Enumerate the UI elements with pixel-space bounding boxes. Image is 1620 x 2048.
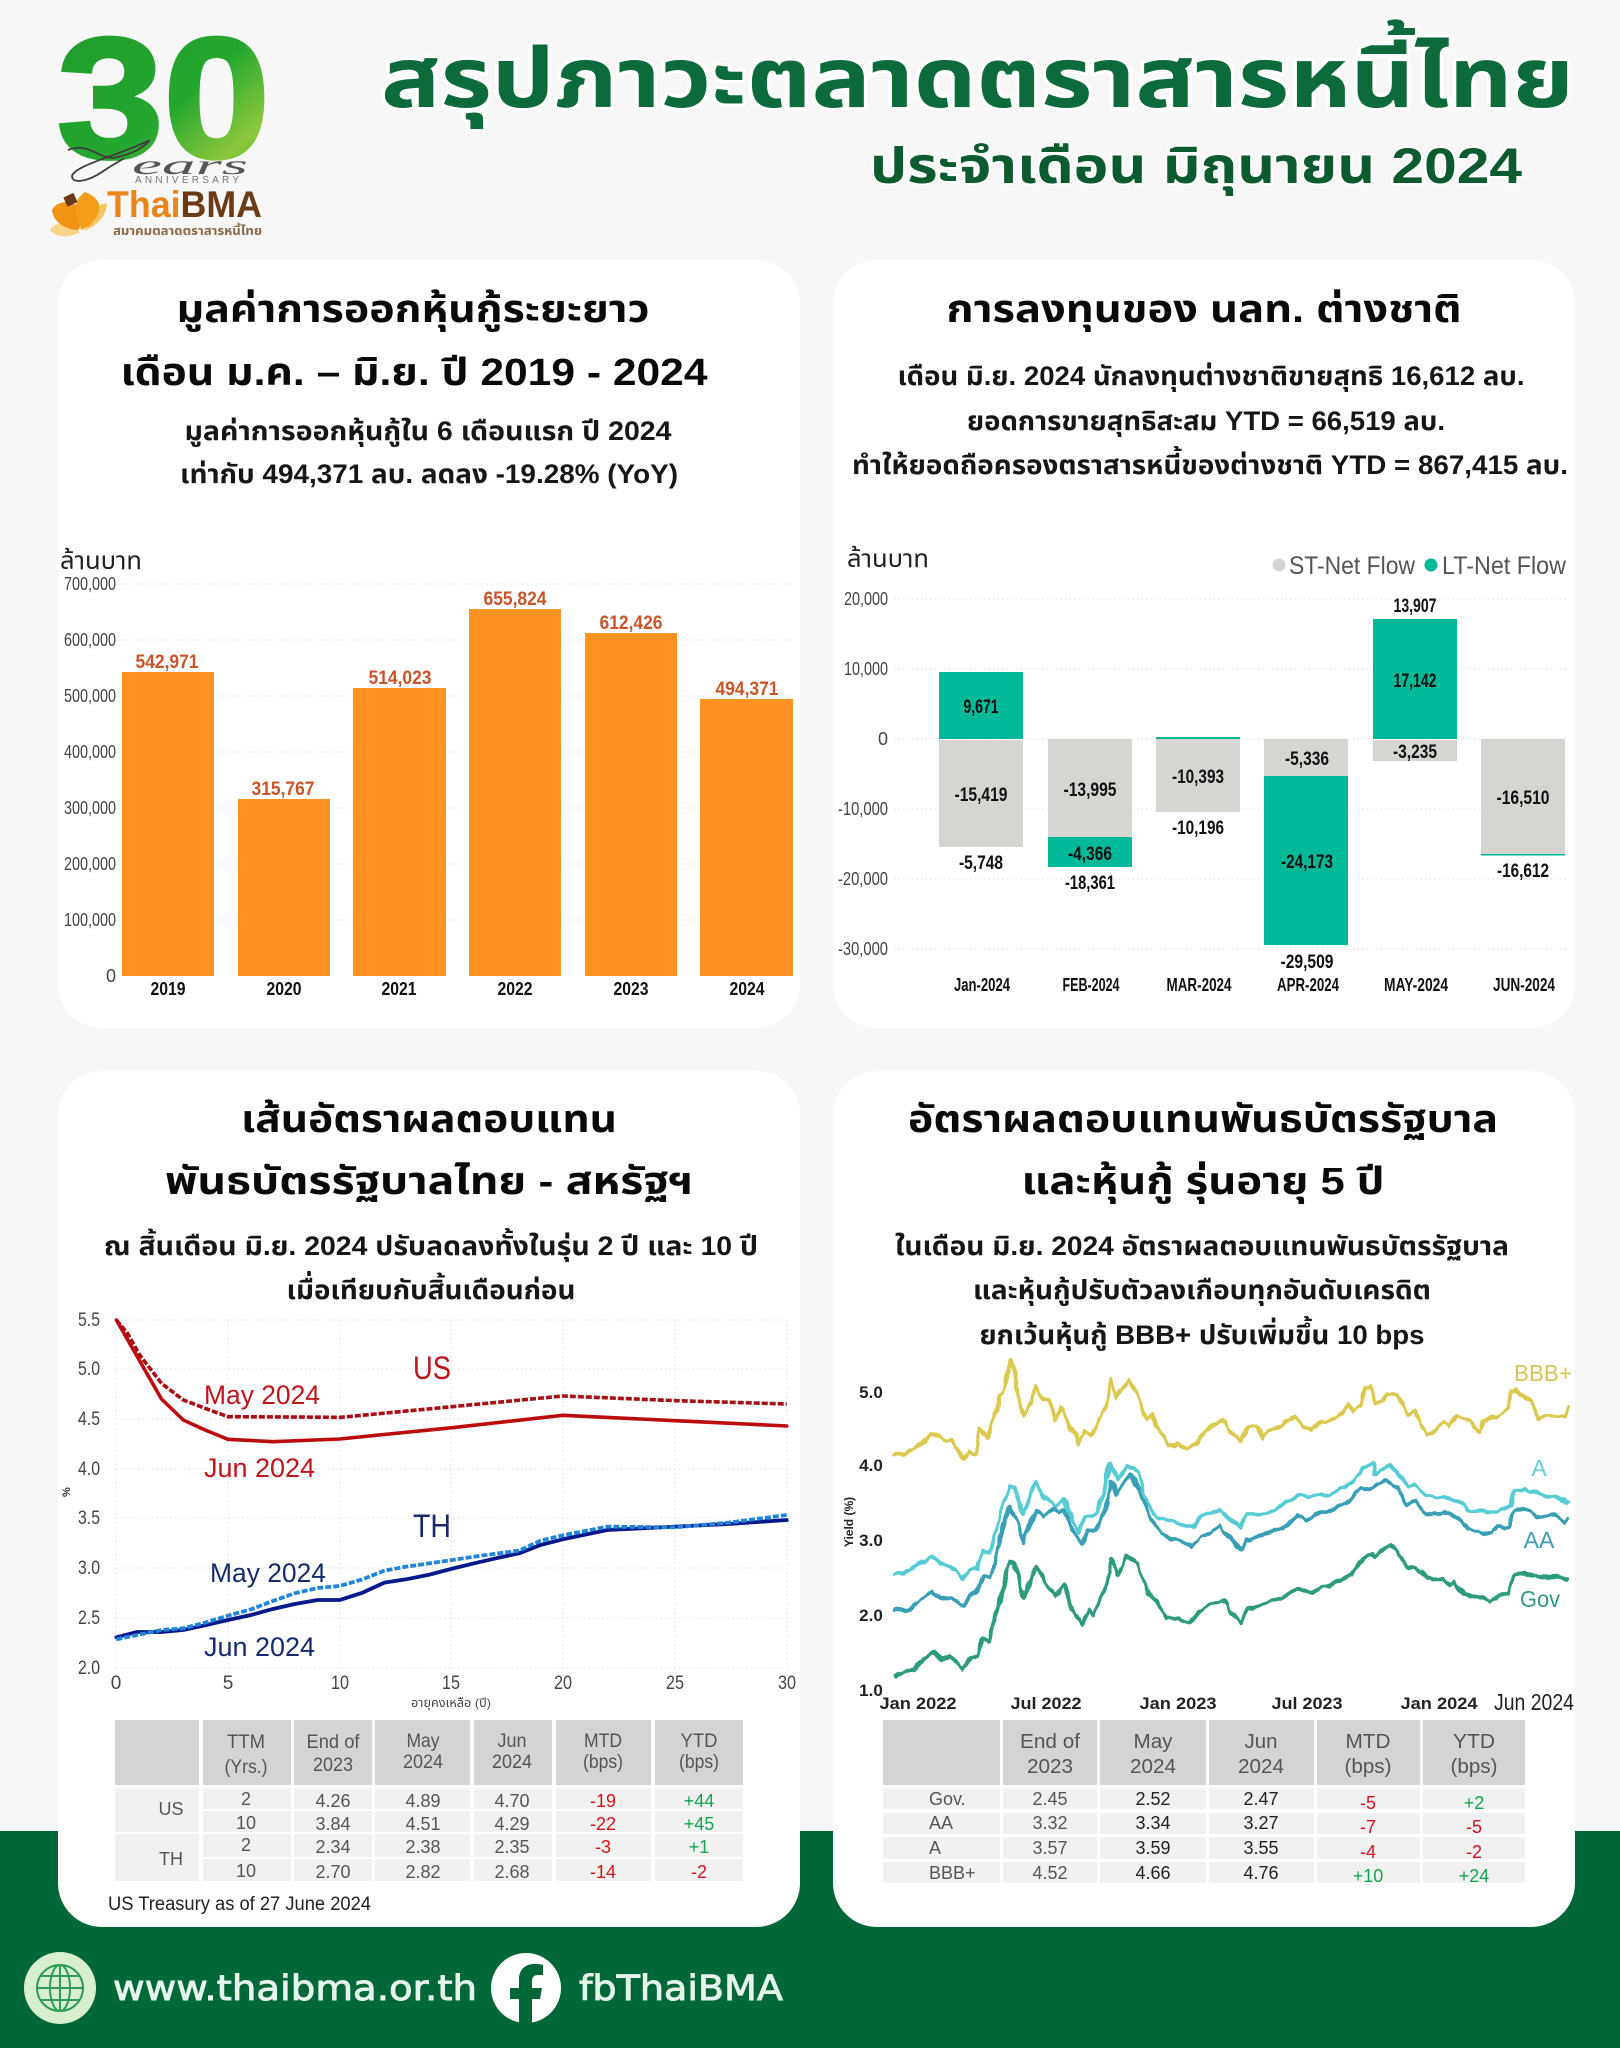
table: US and TH yields: 2.35 [494, 1837, 530, 1857]
table: yields by credit rating: May [1134, 1731, 1172, 1753]
stacked bar chart: net flows: -15,419 [954, 785, 1008, 806]
line: A [895, 1463, 1568, 1578]
stacked bar chart: net flows: -10,000 [838, 799, 888, 819]
table: US and TH yields: -22 [590, 1814, 616, 1834]
line chart: 5-year yields: 5.0 [859, 1383, 883, 1402]
line chart: 5-year yields: 3.0 [859, 1531, 883, 1550]
heading: การลงทุนของ นลท. ต่างชาติ [946, 289, 1462, 332]
legend: ST-Net Flow [1289, 552, 1416, 580]
table: US and TH yields: +44 [684, 1791, 714, 1811]
logo: ThaiBMA 30 years: ears [132, 150, 248, 180]
table: US and TH yields: TTM [227, 1732, 265, 1753]
summary text: ทำให้ยอดถือครองตราสารหนี้ของต่างชาติ YTD = 867,415 ลบ. [852, 446, 1568, 480]
summary text: เมื่อเทียบกับสิ้นเดือนก่อน [286, 1271, 576, 1305]
stacked bar chart: net flows: 20,000 [844, 589, 888, 609]
table: yields by credit rating: 3.59 [1135, 1838, 1171, 1858]
bar chart: issuance 2019-2024: 400,000 [64, 742, 116, 762]
stacked bar chart: net flows: -5,336 [1285, 749, 1329, 770]
line chart: 5-year yields: Jan 2024 [1400, 1694, 1478, 1713]
table: US and TH yields: YTD [680, 1731, 718, 1752]
table: yields by credit rating: (bps) [1344, 1756, 1392, 1778]
stacked bar chart: net flows: -20,000 [838, 869, 888, 889]
table: yields by credit rating: Jun [1244, 1731, 1278, 1753]
bar chart: issuance 2019-2024: 600,000 [64, 630, 116, 650]
line chart: yield curves: อายุคงเหลือ (ปี) [411, 1696, 491, 1710]
logo: ThaiBMA 30 years: สมาคมตลาดตราสารหนี้ไทย [113, 222, 262, 238]
line chart: yield curves: 30 [778, 1673, 796, 1694]
table: US and TH yields: 10 [236, 1813, 256, 1833]
subtitle: ประจำเดือน มิถุนายน 2024 [870, 138, 1522, 196]
line chart: yield curves: 4.0 [78, 1459, 100, 1480]
logo: ThaiBMA 30 years: ThaiBMA [107, 184, 262, 225]
table: yields by credit rating: 4.76 [1243, 1863, 1279, 1883]
line chart: yield curves: 2.0 [78, 1658, 100, 1679]
line chart: 5-year yields: Jun 2024 [1494, 1689, 1574, 1715]
table: yields by credit rating: 4.66 [1135, 1863, 1171, 1883]
stacked bar chart: net flows: -30,000 [838, 939, 888, 959]
table: US and TH yields: 2.70 [315, 1862, 351, 1882]
panel: Thai and US government yield curves [58, 1071, 800, 1927]
line chart: yield curves: 25 [666, 1673, 684, 1694]
table: yields by credit rating: 2024 [1130, 1756, 1176, 1778]
line chart: yield curves: 3.5 [78, 1508, 100, 1529]
line chart: yield curves: May 2024 [210, 1558, 326, 1588]
summary text: ยอดการขายสุทธิสะสม YTD = 66,519 ลบ. [967, 406, 1445, 437]
line chart: yield curves: 15 [442, 1673, 460, 1694]
table: US and TH yields: (bps) [583, 1752, 623, 1773]
table: yields by credit rating: 3.57 [1032, 1838, 1068, 1858]
stacked bar chart: net flows: -24,173 [1281, 852, 1333, 873]
table: yields by credit rating: 2023 [1027, 1756, 1073, 1778]
stacked bar chart: net flows: MAR-2024 [1166, 975, 1232, 995]
line chart: yield curves: % [61, 1487, 73, 1497]
table: US and TH yields: 2.38 [405, 1837, 441, 1857]
legend [1272, 552, 1567, 580]
line: BBB+ [895, 1360, 1568, 1461]
table: US and TH yields: 4.29 [494, 1814, 530, 1834]
stacked bar chart: net flows: APR-2024 [1277, 975, 1339, 995]
line chart: 5-year yields: BBB+ [1514, 1360, 1572, 1386]
logo: ThaiBMA 30 years: ANNIVERSARY [135, 175, 239, 186]
summary text: เท่ากับ 494,371 ลบ. ลดลง -19.28% (YoY) [180, 459, 678, 489]
line chart: yield curves: TH [413, 1508, 451, 1544]
table: yields by credit rating: -7 [1360, 1817, 1376, 1837]
bar chart: issuance 2019-2024: ล้านบาท [60, 547, 142, 575]
stacked bar chart: net flows: 9,671 [964, 697, 999, 718]
line chart: yield curves: 20 [554, 1673, 572, 1694]
panel: long-term corporate bond issuance [58, 260, 800, 1028]
stacked bar chart: net flows: -5,748 [959, 853, 1003, 874]
table: US and TH yields [115, 1720, 743, 1882]
stacked bar chart: net flows: 13,907 [1394, 596, 1436, 617]
table: US and TH yields: -14 [590, 1862, 616, 1882]
table: US and TH yields: -3 [595, 1837, 611, 1857]
stacked bar chart: net flows: ล้านบาท [847, 545, 929, 573]
line chart: yield curves: 4.5 [78, 1409, 100, 1430]
summary text: และหุ้นกู้ปรับตัวลงเกือบทุกอันดับเครดิต [973, 1275, 1431, 1306]
table: US and TH yields: US [158, 1799, 184, 1819]
source note: US Treasury as of 27 June 2024 [108, 1894, 371, 1915]
heading [908, 1099, 1498, 1204]
footer: website: www.thaibma.or.th [113, 1969, 477, 2009]
bar chart: issuance 2019-2024: 2023 [614, 979, 648, 999]
table: yields by credit rating: 4.52 [1032, 1863, 1068, 1883]
line chart: yield curves: 5 [223, 1673, 233, 1694]
line chart: yield curves [61, 1310, 796, 1710]
table: yields by credit rating: +2 [1464, 1793, 1484, 1813]
stacked bar chart: net flows: -4,366 [1068, 844, 1112, 865]
line chart: yield curves: Jun 2024 [204, 1632, 315, 1662]
table: US and TH yields: 4.51 [405, 1814, 441, 1834]
bar chart: issuance 2019-2024: 2024 [730, 979, 764, 999]
table: yields by credit rating: Gov. [929, 1789, 966, 1809]
table: US and TH yields: -2 [691, 1862, 707, 1882]
table: yields by credit rating: 2024 [1238, 1756, 1284, 1778]
heading [120, 289, 708, 394]
line: AA [895, 1475, 1568, 1610]
line: US May 2024 [116, 1320, 787, 1417]
table: yields by credit rating: -4 [1360, 1842, 1376, 1862]
stacked bar chart: net flows: -29,509 [1280, 952, 1334, 973]
table: yields by credit rating [883, 1720, 1525, 1886]
table: US and TH yields: +45 [684, 1814, 714, 1834]
stacked bar chart: net flows: MAY-2024 [1384, 975, 1448, 995]
line chart: yield curves: 10 [331, 1673, 349, 1694]
table: yields by credit rating: -2 [1466, 1842, 1482, 1862]
line: TH Jun 2024 [116, 1520, 787, 1637]
icon: lotus [50, 192, 107, 236]
summary text [180, 416, 678, 489]
table: US and TH yields: 2024 [492, 1752, 532, 1773]
bar chart: issuance 2019-2024: 0 [106, 966, 116, 986]
table: yields by credit rating: 3.27 [1243, 1813, 1279, 1833]
table: yields by credit rating: MTD [1346, 1731, 1390, 1753]
line chart: yield curves: May 2024 [204, 1380, 320, 1410]
footer: facebook: fbThaiBMA [579, 1969, 783, 2009]
line chart: 5-year yields: Jul 2023 [1272, 1694, 1342, 1713]
stacked bar chart: net flows: 17,142 [1394, 671, 1436, 692]
table: yields by credit rating: YTD [1453, 1731, 1495, 1753]
summary text: ณ สิ้นเดือน มิ.ย. 2024 ปรับลดลงทั้งในรุ่น 2 ปี และ 10 ปี [104, 1228, 758, 1262]
table: US and TH yields: 2.34 [315, 1837, 351, 1857]
bar chart: issuance 2019-2024: 655,824 [484, 589, 547, 610]
table: yields by credit rating: End of [1020, 1731, 1080, 1753]
table: US and TH yields: 2 [241, 1789, 251, 1809]
table: yields by credit rating: -5 [1360, 1793, 1376, 1813]
bar chart: issuance 2019-2024: 100,000 [64, 910, 116, 930]
bar chart: issuance 2019-2024: 494,371 [716, 679, 779, 700]
table: yields by credit rating: AA [929, 1813, 953, 1833]
line chart: yield curves: 0 [111, 1673, 121, 1694]
table: yields by credit rating: 3.34 [1135, 1813, 1171, 1833]
stacked bar chart: net flows: -3,235 [1393, 742, 1437, 763]
table: US and TH yields: +1 [689, 1837, 709, 1857]
table: yields by credit rating: 2.52 [1135, 1789, 1171, 1809]
stacked bar chart: net flows: 0 [878, 729, 888, 749]
table: US and TH yields: (bps) [679, 1752, 719, 1773]
bar chart: issuance 2019-2024: 700,000 [64, 574, 116, 594]
bar chart: issuance 2019-2024: 2020 [266, 979, 302, 999]
table: US and TH yields: 2024 [403, 1752, 443, 1773]
table: US and TH yields: Jun [498, 1731, 526, 1752]
table: US and TH yields: 2 [241, 1835, 251, 1855]
table: US and TH yields: 2.82 [405, 1862, 441, 1882]
stacked bar chart: net flows: 10,000 [844, 659, 888, 679]
summary text: ในเดือน มิ.ย. 2024 อัตราผลตอบแทนพันธบัตรรัฐบาล [895, 1231, 1509, 1261]
icon: facebook [491, 1953, 561, 2023]
heading: พันธบัตรรัฐบาลไทย - สหรัฐฯ [165, 1161, 693, 1203]
footer: facebook [491, 1953, 783, 2023]
table: yields by credit rating: (bps) [1450, 1756, 1498, 1778]
table: yields by credit rating: BBB+ [929, 1863, 976, 1883]
footer: website [24, 1952, 477, 2024]
summary text [104, 1228, 758, 1305]
line chart: 5-year yields: A [1531, 1455, 1547, 1481]
table: US and TH yields: 4.89 [405, 1791, 441, 1811]
line chart: yield curves: 3.0 [78, 1558, 100, 1579]
panel: foreign investors [833, 260, 1575, 1028]
legend: LT-Net Flow [1442, 552, 1567, 580]
title: สรุปภาวะตลาดตราสารหนี้ไทย [381, 19, 1574, 129]
stacked bar chart: net flows: -10,393 [1172, 767, 1224, 788]
heading: มูลค่าการออกหุ้นกู้ระยะยาว [176, 289, 650, 332]
line chart: yield curves: 2.5 [78, 1608, 100, 1629]
stacked bar chart: net flows: FEB-2024 [1062, 975, 1120, 995]
summary text: มูลค่าการออกหุ้นกู้ใน 6 เดือนแรก ปี 2024 [184, 416, 672, 447]
bar chart: issuance 2019-2024: 2022 [498, 979, 532, 999]
line chart: 5-year yields: 4.0 [859, 1456, 883, 1475]
icon: globe [24, 1952, 96, 2024]
footer band [0, 1831, 1620, 2048]
line chart: yield curves: 5.5 [78, 1310, 100, 1331]
line chart: 5-year yields: 2.0 [859, 1606, 883, 1625]
stacked bar chart: net flows: JUN-2024 [1493, 975, 1555, 995]
line chart: yield curves: 5.0 [78, 1359, 100, 1380]
table: US and TH yields: (Yrs.) [224, 1757, 268, 1778]
table: US and TH yields: 10 [236, 1861, 256, 1881]
stacked bar chart: net flows: -13,995 [1064, 780, 1117, 801]
bar chart: issuance 2019-2024: 612,426 [600, 613, 662, 634]
bar chart: issuance 2019-2024: 542,971 [136, 652, 199, 673]
table: yields by credit rating: +24 [1459, 1866, 1489, 1886]
line chart: 5-year yields: Yield (%) [842, 1497, 856, 1547]
bar chart: issuance 2019-2024: 315,767 [252, 779, 314, 800]
bar chart: issuance 2019-2024: 2021 [382, 979, 416, 999]
table: yields by credit rating: 3.32 [1032, 1813, 1068, 1833]
logo: ThaiBMA 30 years: 30 [57, 3, 270, 194]
stacked bar chart: net flows: -10,196 [1172, 818, 1224, 839]
bar chart: issuance 2019-2024: 200,000 [64, 854, 116, 874]
table: US and TH yields: 2.68 [494, 1862, 530, 1882]
heading: และหุ้นกู้ รุ่นอายุ 5 ปี [1022, 1161, 1384, 1204]
line: US Jun 2024 [116, 1320, 787, 1442]
table: US and TH yields: 2023 [313, 1755, 353, 1776]
stacked bar chart: net flows: -16,612 [1497, 861, 1549, 882]
line chart: 5-year yields: Gov [1520, 1586, 1560, 1612]
line chart: yield curves: Jun 2024 [204, 1453, 315, 1483]
line chart: 5-year yields [842, 1360, 1574, 1715]
table: US and TH yields: May [406, 1731, 440, 1752]
table: US and TH yields: 3.84 [315, 1814, 351, 1834]
table: yields by credit rating: +10 [1353, 1866, 1383, 1886]
table: US and TH yields: TH [159, 1849, 183, 1869]
table: US and TH yields: 4.70 [494, 1791, 530, 1811]
heading [165, 1099, 693, 1203]
summary text: เดือน มิ.ย. 2024 นักลงทุนต่างชาติขายสุทธิ 16,612 ลบ. [898, 361, 1524, 392]
line chart: yield curves: US [413, 1350, 451, 1386]
stacked bar chart: net flows: -16,510 [1496, 788, 1550, 809]
line: TH May 2024 [116, 1515, 787, 1639]
bar chart: issuance 2019-2024: 2019 [150, 979, 186, 999]
line chart: 5-year yields: Jan 2022 [880, 1694, 956, 1713]
table: US and TH yields: -19 [590, 1791, 616, 1811]
table: yields by credit rating: -5 [1466, 1817, 1482, 1837]
bar chart: issuance 2019-2024: 300,000 [64, 798, 116, 818]
table: US and TH yields: 4.26 [315, 1791, 351, 1811]
heading: เส้นอัตราผลตอบแทน [241, 1099, 617, 1141]
bar chart: issuance 2019-2024: 500,000 [64, 686, 116, 706]
table: yields by credit rating: 2.47 [1243, 1789, 1279, 1809]
summary text [895, 1231, 1509, 1351]
line chart: 5-year yields: 1.0 [859, 1681, 883, 1700]
stacked bar chart: net flows: -18,361 [1065, 873, 1115, 894]
table: yields by credit rating: 3.55 [1243, 1838, 1279, 1858]
table: US and TH yields: End of [306, 1732, 360, 1753]
line chart: 5-year yields: Jul 2022 [1010, 1694, 1082, 1713]
table: US and TH yields: MTD [584, 1731, 622, 1752]
heading: อัตราผลตอบแทนพันธบัตรรัฐบาล [908, 1099, 1498, 1141]
heading: เดือน ม.ค. – มิ.ย. ปี 2019 - 2024 [120, 352, 708, 394]
summary text [852, 361, 1568, 480]
stacked bar chart: net flows: Jan-2024 [954, 975, 1010, 995]
line chart: 5-year yields: Jan 2023 [1140, 1694, 1216, 1713]
line chart: 5-year yields: AA [1524, 1527, 1555, 1553]
line: Gov [895, 1546, 1568, 1677]
bar chart: issuance 2019-2024: 514,023 [368, 668, 432, 689]
table: yields by credit rating: 2.45 [1032, 1789, 1068, 1809]
stacked bar chart: net flows [838, 545, 1567, 995]
table: yields by credit rating: A [929, 1838, 941, 1858]
panel: government and corporate 5-year yields [833, 1071, 1575, 1927]
summary text: ยกเว้นหุ้นกู้ BBB+ ปรับเพิ่มขึ้น 10 bps [980, 1316, 1424, 1351]
bar chart: issuance 2019-2024 [60, 547, 793, 999]
